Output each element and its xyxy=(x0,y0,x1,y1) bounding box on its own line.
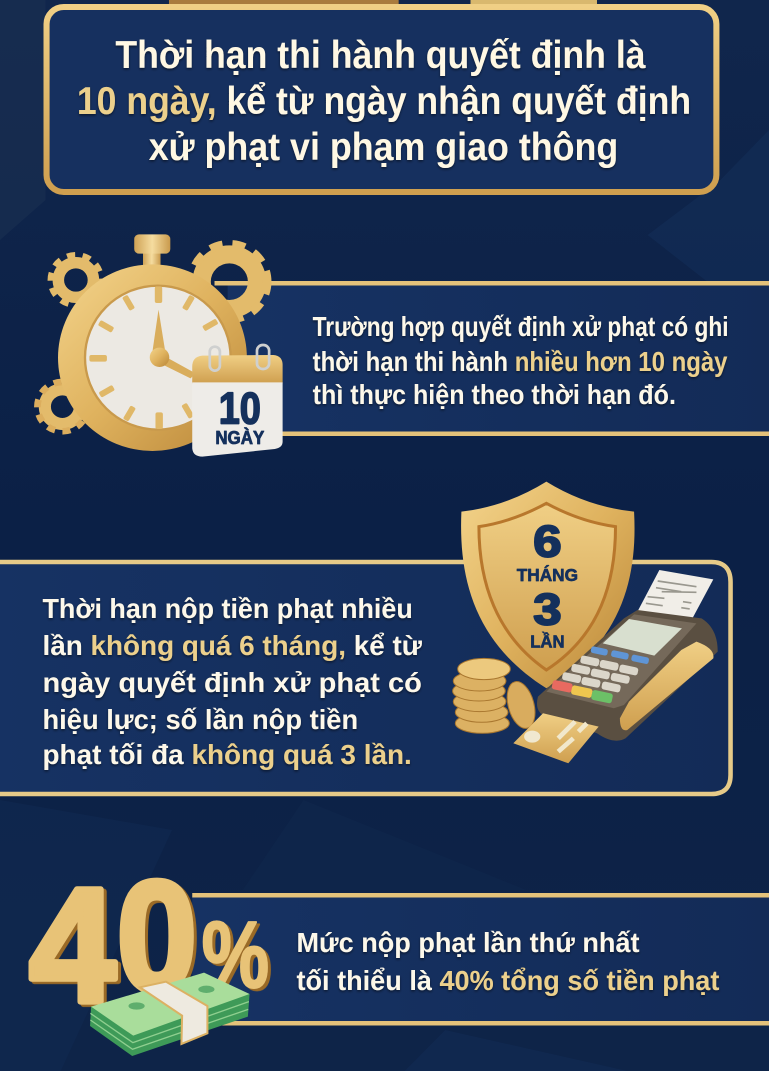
icon: 40 percent and banknotes xyxy=(29,849,269,1056)
panel: heading xyxy=(47,7,716,192)
calendar: NGÀY xyxy=(215,427,265,448)
banknotes xyxy=(90,973,250,1056)
heading text xyxy=(77,33,691,169)
panel text: Thời hạn nộp tiền phạt nhiều xyxy=(42,593,413,624)
receipt xyxy=(637,570,713,623)
shield: LẦN xyxy=(530,630,565,651)
panel text: phạt tối đa không quá 3 lần. xyxy=(42,739,412,770)
terminal xyxy=(537,610,718,741)
panel text: lần không quá 6 tháng, kể từ xyxy=(42,630,423,661)
panel: 40 percent xyxy=(192,893,769,1026)
heading text: xử phạt vi phạm giao thông xyxy=(149,125,618,169)
panel text xyxy=(42,593,423,770)
calendar: 10 xyxy=(219,385,261,433)
panel text xyxy=(313,311,729,410)
heading text: 10 ngày, kể từ ngày nhận quyết định xyxy=(77,79,691,123)
icon: stopwatch with gears and calendar xyxy=(37,234,283,457)
panel text: thời hạn thi hành nhiều hơn 10 ngày xyxy=(313,346,728,377)
shield: THÁNG xyxy=(517,564,578,585)
icon: shield, coins, payment terminal xyxy=(453,482,718,763)
panel text: hiệu lực; số lần nộp tiền xyxy=(42,704,358,735)
panel text: ngày quyết định xử phạt có xyxy=(42,667,422,698)
panel: 10 days xyxy=(215,281,769,436)
panel text: tối thiểu là 40% tổng số tiền phạt xyxy=(296,965,719,996)
number 40%: 0 xyxy=(117,849,197,1024)
heading text: Thời hạn thi hành quyết định là xyxy=(115,33,646,77)
stopwatch body xyxy=(58,264,247,451)
calendar xyxy=(192,345,283,457)
coins xyxy=(453,658,540,733)
panel: payment period xyxy=(0,562,731,794)
number 40% xyxy=(29,849,269,1036)
panel text: Mức nộp phạt lần thứ nhất xyxy=(296,927,639,958)
top object stubs xyxy=(169,0,597,5)
gears xyxy=(37,244,267,431)
shield: 6 xyxy=(533,518,562,567)
shield xyxy=(461,482,635,688)
stopwatch crown xyxy=(134,234,170,265)
panel text: thì thực hiện theo thời hạn đó. xyxy=(313,379,676,410)
number 40%: 4 xyxy=(29,854,116,1036)
panel text xyxy=(296,927,719,996)
shield: 3 xyxy=(533,586,562,634)
credit card xyxy=(513,713,599,763)
number 40%: % xyxy=(202,903,269,1008)
